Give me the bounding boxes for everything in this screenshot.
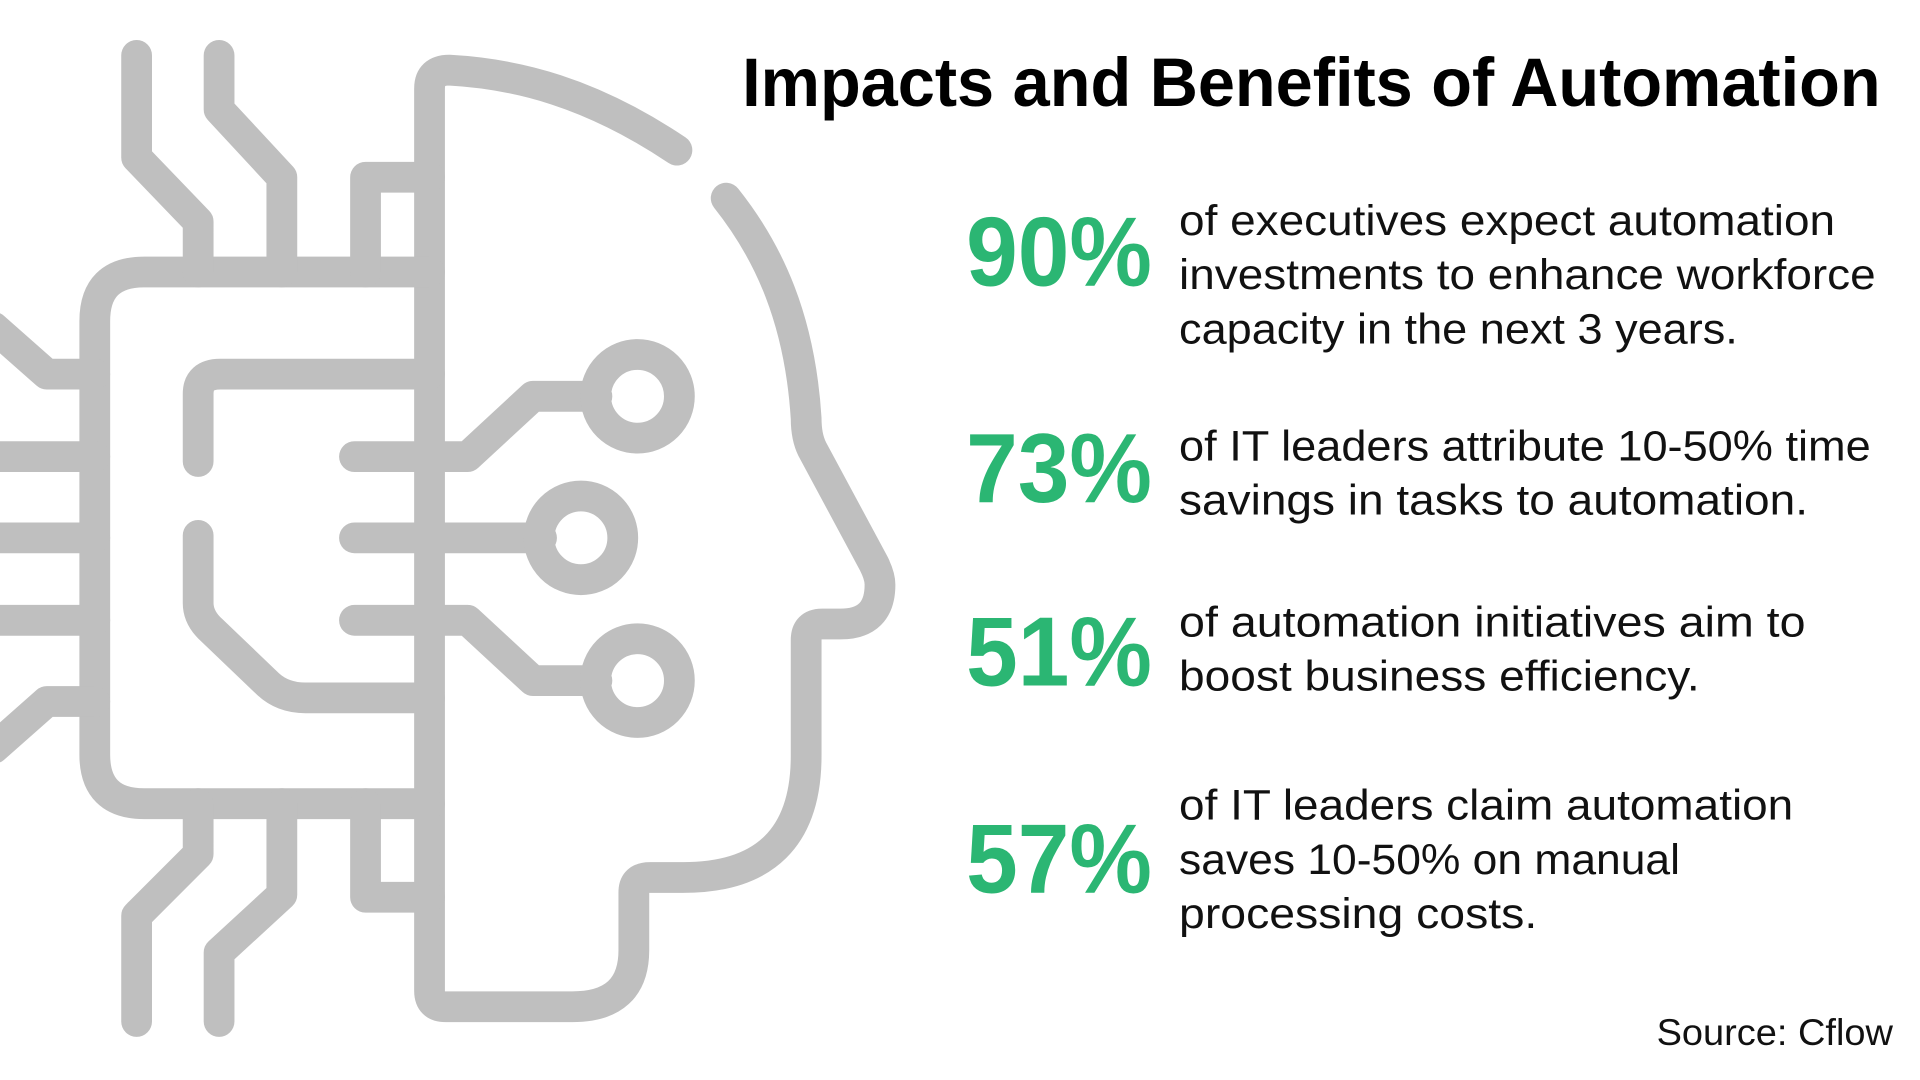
stat: 57%: 57% (966, 803, 1152, 913)
stat: 90%: investments to enhance workforce (1179, 251, 1876, 299)
stat: 57% (966, 782, 1805, 938)
source note: Source: Cflow (1657, 1012, 1893, 1053)
stat: 73%: of IT leaders attribute 10-50% time (1179, 422, 1871, 470)
stat: 57%: processing costs. (1179, 890, 1537, 938)
stat: 57%: of IT leaders claim automation (1179, 782, 1793, 830)
stat: 51%: of automation initiatives aim to (1179, 598, 1806, 646)
title: Impacts and Benefits of Automation (742, 44, 1881, 121)
stat: 90%: capacity in the next 3 years. (1179, 305, 1738, 353)
stat: 90% (966, 197, 1888, 353)
stat: 73%: 73% (966, 413, 1152, 523)
stat: 90%: 90% (966, 197, 1152, 307)
stat: 51%: boost business efficiency. (1179, 652, 1700, 700)
icon: AI head with circuit (0, 55, 880, 1022)
stat: 51% (966, 597, 1818, 707)
stat: 73%: savings in tasks to automation. (1179, 476, 1808, 524)
stat: 51%: 51% (966, 597, 1152, 707)
stat: 57%: saves 10-50% on manual (1179, 836, 1680, 884)
stat: 73% (966, 413, 1883, 524)
stat: 90%: of executives expect automation (1179, 197, 1835, 245)
